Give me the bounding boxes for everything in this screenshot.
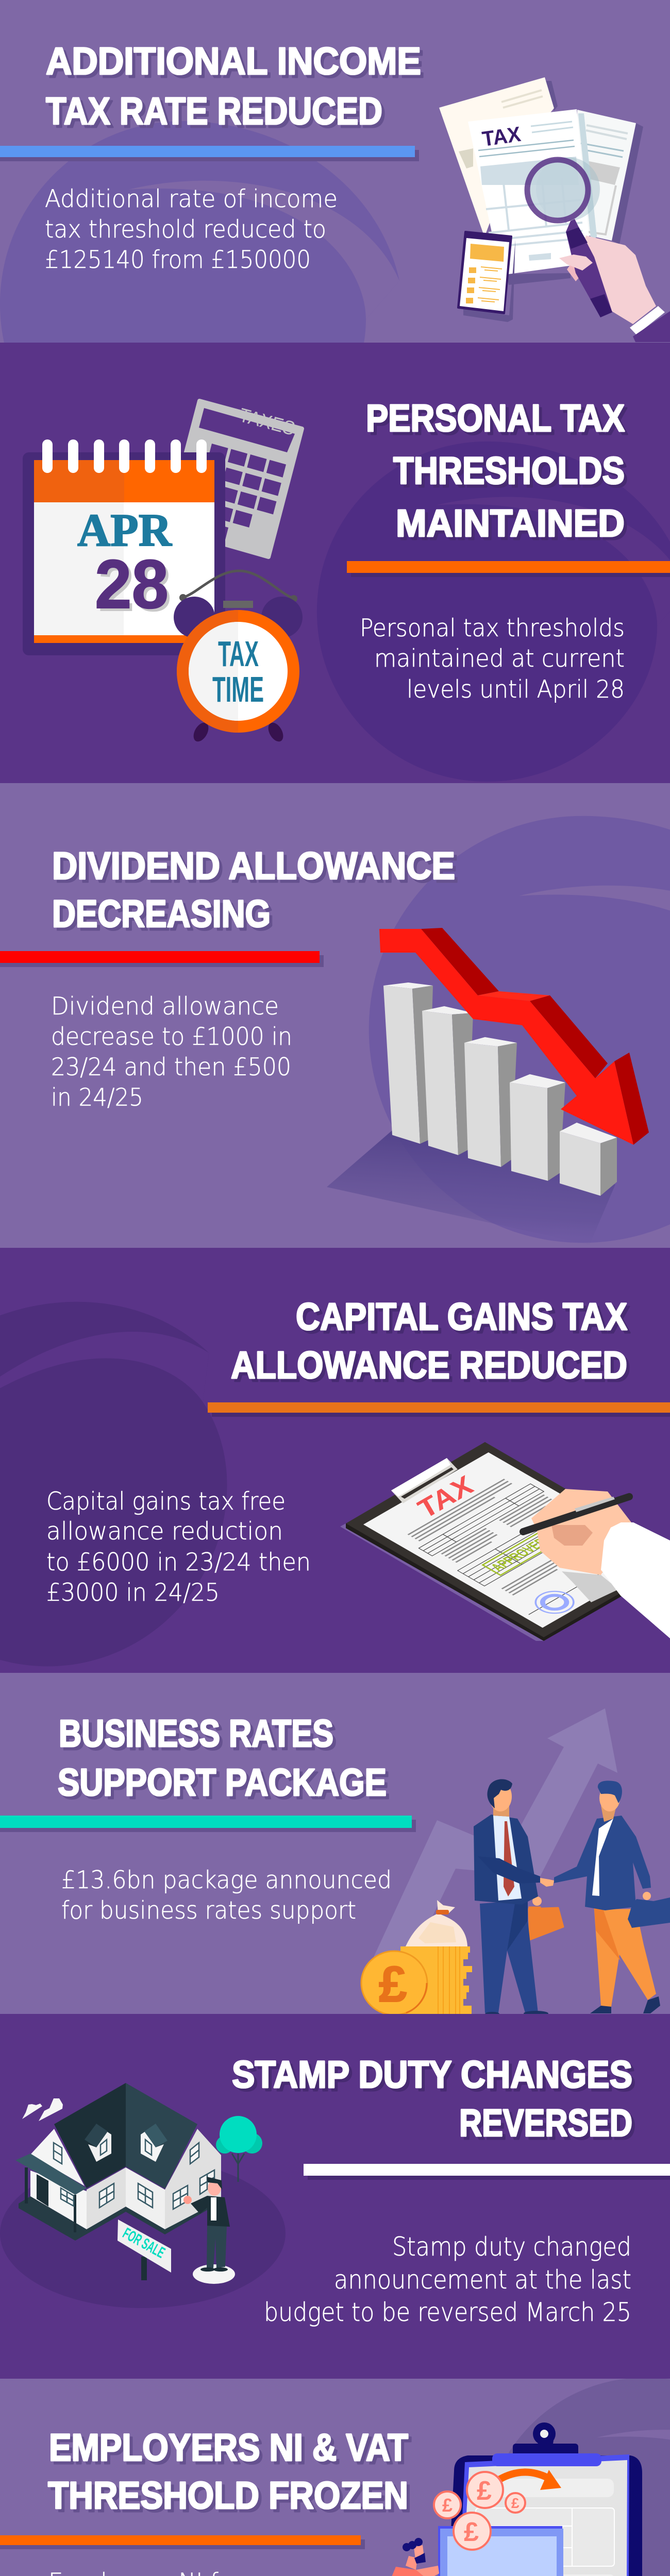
accent bar xyxy=(0,1816,416,1832)
arrows xyxy=(483,2470,561,2576)
person: right man with orange trousers xyxy=(540,1781,670,2013)
heading xyxy=(231,1295,627,1386)
body text: Additional rate of income xyxy=(45,185,338,213)
heading: ADDITIONAL INCOME xyxy=(46,40,421,82)
accent bar xyxy=(0,951,324,967)
body text: levels until April 28 xyxy=(407,675,625,704)
body text: to £6000 in 23/24 then xyxy=(46,1548,311,1577)
body text: budget to be reversed March 25 xyxy=(264,2297,631,2327)
body text: Personal tax thresholds xyxy=(360,614,625,642)
form title: TAX xyxy=(413,1470,478,1524)
body text: allowance reduction xyxy=(46,1517,283,1546)
money bag and coins xyxy=(361,1900,472,2015)
tree xyxy=(216,2116,262,2182)
body text: tax threshold reduced to xyxy=(45,215,326,244)
banknote xyxy=(438,2526,563,2576)
heading: SUPPORT PACKAGE xyxy=(58,1761,387,1804)
heading: ALLOWANCE REDUCED xyxy=(231,1344,627,1386)
heading: DECREASING xyxy=(52,892,271,935)
icon: calendar April 28: 28 xyxy=(95,546,169,623)
icon: clipboard, banknote and coins: £ xyxy=(464,2517,479,2547)
body text: Dividend allowance xyxy=(51,992,279,1021)
icon: clipboard, banknote and coins: £ xyxy=(477,2476,492,2506)
heading: EMPLOYERS NI & VAT xyxy=(49,2426,408,2469)
heading: CAPITAL GAINS TAX xyxy=(296,1295,627,1338)
heading: BUSINESS RATES xyxy=(59,1712,333,1755)
person: man pushing banknote xyxy=(374,2538,460,2576)
panel: employers NI and VAT threshold frozen xyxy=(0,2378,670,2576)
stamp: APPROVED xyxy=(487,1536,552,1573)
body text: £125140 from £150000 xyxy=(45,246,311,274)
heading: REVERSED xyxy=(459,2102,632,2144)
body text: announcement at the last xyxy=(334,2265,631,2295)
body text xyxy=(360,614,625,704)
heading xyxy=(48,2426,408,2517)
calculator label: TAXES xyxy=(237,404,297,440)
stamp xyxy=(482,1533,557,1575)
panel: capital gains tax allowance reduced xyxy=(0,1248,670,1673)
heading xyxy=(58,1712,387,1804)
icon: house for sale xyxy=(0,2083,286,2308)
accent bar xyxy=(208,1402,670,1417)
clouds xyxy=(22,2098,63,2121)
body text xyxy=(264,2232,631,2327)
icon: calendar April 28 xyxy=(23,439,225,655)
body text: 23/24 and then £500 xyxy=(51,1053,291,1081)
icon: clipboard with tax form and writing hand xyxy=(340,1442,670,1641)
accent bar xyxy=(347,561,670,577)
heading xyxy=(46,40,421,132)
clock label xyxy=(212,634,264,709)
icon: tax time alarm clock xyxy=(174,571,303,744)
heading: THRESHOLD FROZEN xyxy=(48,2474,408,2517)
panel: personal tax thresholds maintained xyxy=(0,343,670,783)
icon: clipboard, banknote and coins: £ xyxy=(442,2495,453,2516)
icon: calculator xyxy=(166,401,302,557)
calendar day: 28 xyxy=(98,549,172,626)
body text: maintained at current xyxy=(374,645,625,673)
body text: £13.6bn package announced xyxy=(61,1866,392,1894)
body text: Capital gains tax free xyxy=(46,1487,286,1516)
icon: tax forms, magnifier and phone xyxy=(439,77,670,342)
arrow: falling red arrow xyxy=(379,928,649,1145)
icon: clipboard, banknote and coins: £ xyxy=(511,2495,520,2511)
body text xyxy=(46,1487,311,1607)
accent bar xyxy=(0,146,419,161)
panel: dividend allowance decreasing xyxy=(0,783,670,1248)
icon: clipboard, banknote and coins xyxy=(374,2422,642,2576)
body text: for business rates support xyxy=(61,1896,356,1925)
accent bar xyxy=(304,2164,670,2180)
coins xyxy=(434,2472,525,2550)
heading: THRESHOLDS xyxy=(393,449,625,492)
form sheet xyxy=(363,1452,667,1628)
accent bar xyxy=(0,2535,365,2549)
chart: falling bars with red arrow xyxy=(327,928,649,1245)
for sale sign: FOR SALE xyxy=(120,2225,168,2262)
body text xyxy=(51,992,292,1112)
panel: stamp duty changes reversed xyxy=(0,2014,670,2379)
tax form label: TAX xyxy=(481,122,522,151)
body text: Stamp duty changed xyxy=(392,2232,631,2262)
person: left man with tie xyxy=(474,1779,563,2016)
body text xyxy=(61,1866,392,1925)
body text: in 24/25 xyxy=(51,1083,143,1112)
body text: decrease to £1000 in xyxy=(51,1023,292,1051)
panel: business rates support package xyxy=(0,1708,670,2014)
heading: MAINTAINED xyxy=(396,502,625,545)
calendar month: APR xyxy=(77,505,172,556)
coin symbol: £ xyxy=(379,1956,407,2012)
heading: TAX RATE REDUCED xyxy=(46,90,382,132)
icon: rising arrow, handshake and money xyxy=(361,1708,670,2016)
heading xyxy=(366,397,625,545)
for sale sign xyxy=(118,2219,171,2280)
heading xyxy=(232,2053,632,2144)
body text: £3000 in 24/25 xyxy=(46,1579,220,1607)
clock label: TIME xyxy=(212,669,264,709)
clock label: TAX xyxy=(218,634,259,674)
heading xyxy=(52,844,455,935)
heading: DIVIDEND ALLOWANCE xyxy=(52,844,455,887)
heading: STAMP DUTY CHANGES xyxy=(232,2053,632,2096)
body text xyxy=(45,185,338,274)
person: estate agent xyxy=(183,2177,235,2284)
heading: PERSONAL TAX xyxy=(366,397,625,439)
panel: additional income tax rate reduced xyxy=(0,46,670,343)
